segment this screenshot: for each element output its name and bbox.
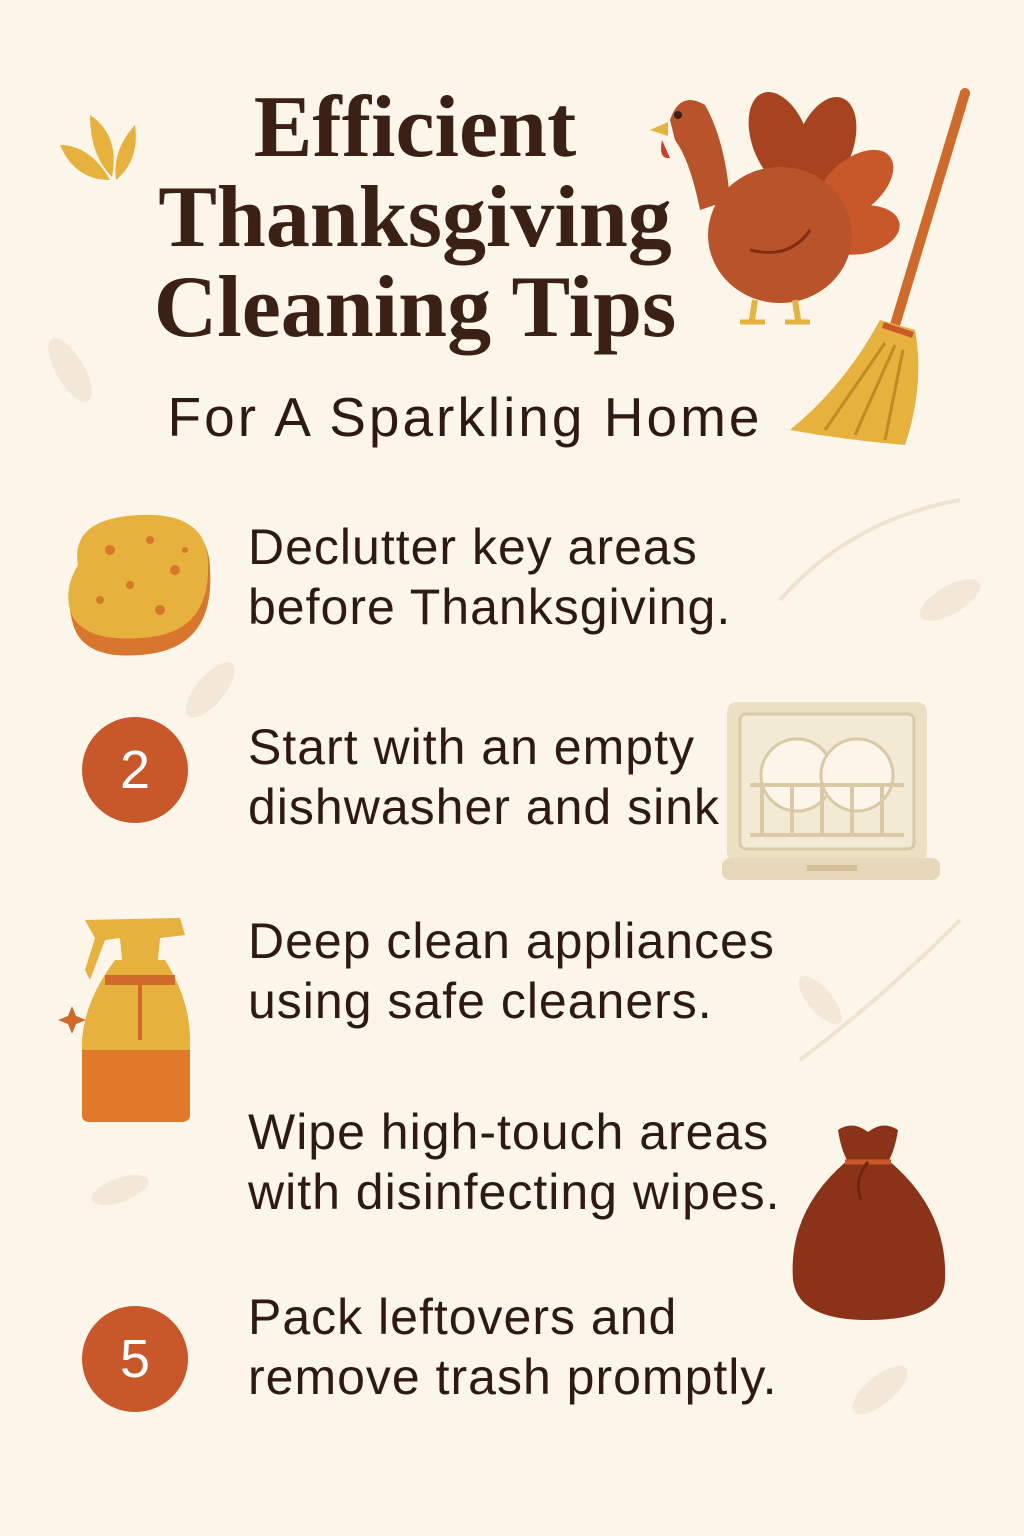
text: tip 5: Pack leftovers and (248, 1289, 677, 1345)
badge: 2: 2 (120, 740, 150, 800)
icon: trash bag (792, 1126, 946, 1320)
title: Thanksgiving (158, 169, 672, 266)
tip 5 (82, 1126, 860, 1412)
subtitle: For A Sparkling Home (168, 386, 762, 448)
text: tip 1 (68, 514, 731, 656)
text: tip 2: dishwasher and sink (248, 779, 720, 835)
text: tip 3 (82, 913, 775, 1040)
icon: broom (790, 88, 970, 445)
text: tip 1: before Thanksgiving. (248, 579, 731, 635)
title: Cleaning Tips (154, 259, 676, 356)
icon: leaf top-left (60, 115, 136, 180)
text: tip 5 (248, 1289, 778, 1405)
icon: sponge (68, 514, 210, 656)
text: tip 2 (248, 719, 720, 835)
badge: 5 (82, 1306, 188, 1412)
text: tip 4 (248, 1104, 781, 1220)
text: tip 1: Declutter key areas (248, 519, 698, 575)
icon: spray bottle (58, 918, 190, 1122)
tip 3 (58, 913, 775, 1122)
title: Efficient (254, 79, 576, 176)
title (154, 79, 892, 356)
text: tip 2: Start with an empty (248, 719, 695, 775)
text: tip 4: with disinfecting wipes. (248, 1164, 781, 1220)
badge: 2 (82, 717, 188, 823)
badge: 5: 5 (120, 1329, 150, 1389)
icon: dishwasher (722, 702, 940, 880)
tip 2 (82, 702, 940, 880)
text: tip 5: remove trash promptly. (248, 1349, 778, 1405)
text: tip 4: Wipe high-touch areas (248, 1104, 769, 1160)
tip 1 (68, 514, 731, 656)
text: tip 3: Deep clean appliances (248, 913, 775, 969)
text: tip 3: using safe cleaners. (248, 973, 713, 1029)
icon: turkey (650, 92, 900, 324)
tip 4 (188, 1104, 946, 1355)
